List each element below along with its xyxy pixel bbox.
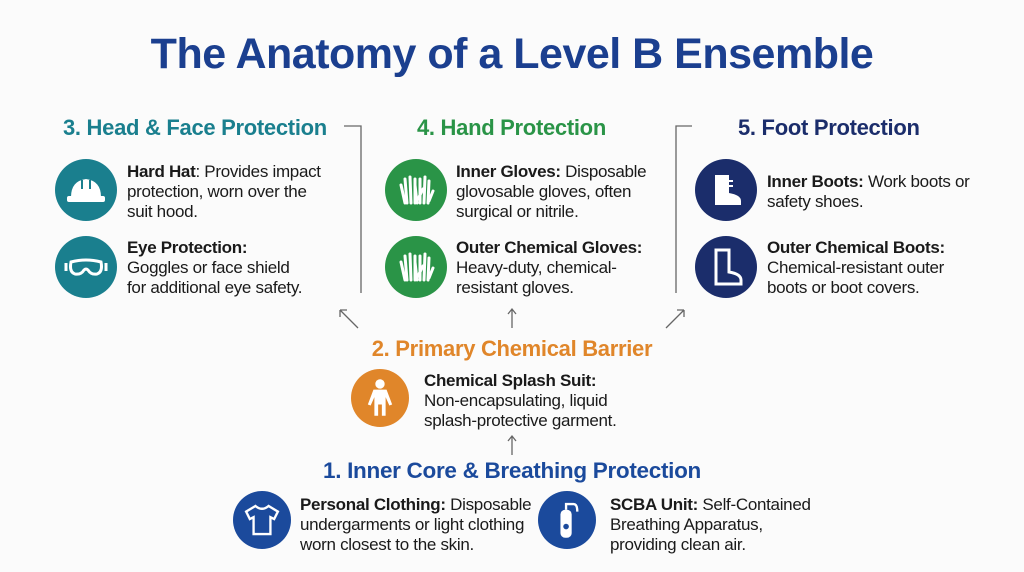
text: hard hat: suit hood. [127,202,198,221]
text: outer boots [767,238,945,297]
text: scba: SCBA Unit: Self-Contained [610,495,811,514]
heading: primary barrier: 2. Primary Chemical Barrier [372,336,652,361]
text: outer gloves [456,238,642,297]
text: splash suit: splash-protective garment. [424,411,617,430]
text: eye protection: Goggles or face shield [127,258,290,277]
text: splash suit [424,371,617,430]
text: splash suit: Non-encapsulating, liquid [424,391,607,410]
icon: clothing [233,491,291,549]
icon: inner boots [695,159,757,221]
text: outer gloves: resistant gloves. [456,278,574,297]
text: clothing: worn closest to the skin. [300,535,474,554]
text: inner boots [767,172,970,211]
text: clothing: undergarments or light clothing [300,515,524,534]
icon: outer boots [695,236,757,298]
text: eye protection: Eye Protection: [127,238,247,257]
icon: splash suit [351,369,409,427]
text: outer gloves: Outer Chemical Gloves: [456,238,642,257]
text: inner gloves: surgical or nitrile. [456,202,578,221]
icon: goggles [55,236,117,298]
text: outer gloves: Heavy-duty, chemical- [456,258,617,277]
heading: hand: 4. Hand Protection [417,115,606,140]
text: clothing: Personal Clothing: Disposable [300,495,531,514]
text: scba: Breathing Apparatus, [610,515,763,534]
icon: scba [538,491,596,549]
text: inner boots: Inner Boots: Work boots or [767,172,970,191]
text: hard hat: protection, worn over the [127,182,307,201]
icon: inner gloves [385,159,447,221]
title: The Anatomy of a Level B Ensemble [151,30,873,78]
heading: foot: 5. Foot Protection [738,115,920,140]
icon: hard hat [55,159,117,221]
text: hard hat [127,162,321,221]
text: hard hat: Hard Hat: Provides impact [127,162,321,181]
heading: head & face: 3. Head & Face Protection [63,115,327,140]
text: scba: providing clean air. [610,535,746,554]
text: clothing [300,495,531,554]
text: splash suit: Chemical Splash Suit: [424,371,596,390]
text: outer boots: Outer Chemical Boots: [767,238,945,257]
text: inner gloves: glovosable gloves, often [456,182,631,201]
text: scba [610,495,811,554]
text: outer boots: boots or boot covers. [767,278,919,297]
heading: inner core: 1. Inner Core & Breathing Protection [323,458,701,483]
icon: outer gloves [385,236,447,298]
text: inner gloves: Inner Gloves: Disposable [456,162,646,181]
text: inner gloves [456,162,646,221]
text: inner boots: safety shoes. [767,192,863,211]
text: outer boots: Chemical-resistant outer [767,258,944,277]
text: eye protection [127,238,302,297]
text: eye protection: for additional eye safety. [127,278,302,297]
